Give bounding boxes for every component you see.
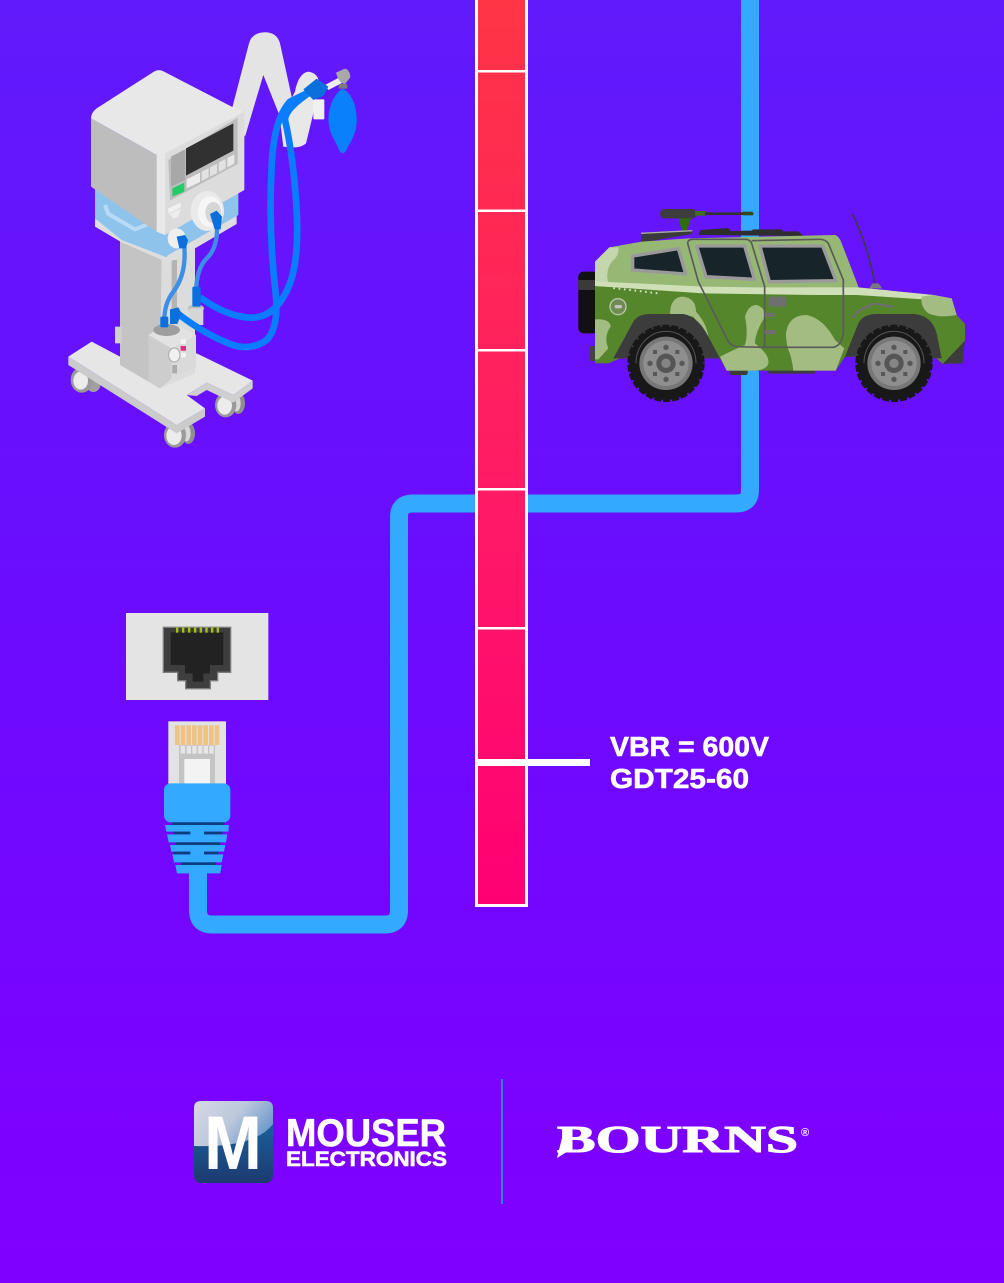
ventilator shelf (95, 213, 237, 263)
fuel cap and rivets (610, 288, 658, 315)
Mouser icon: M (204, 1101, 262, 1186)
main breathing hoses (178, 90, 313, 347)
plug boot (164, 783, 230, 893)
side mirror cable (853, 304, 893, 317)
resuscitator bag (328, 88, 357, 153)
wheels (71, 367, 245, 448)
rear wheel (629, 327, 703, 400)
breathing tube connector (325, 69, 350, 90)
roof rack (641, 228, 803, 243)
voltage label: VBR = 600V (610, 731, 769, 762)
Mouser wordmark (286, 1112, 447, 1171)
voltage label: GDT25-60 (610, 763, 749, 794)
rear bumper (590, 346, 600, 361)
underbody (729, 340, 965, 375)
icon: ethernet socket (126, 613, 268, 700)
door outlines (688, 239, 843, 347)
vehicle lower body (595, 286, 965, 371)
ventilator column (115, 230, 204, 388)
plug contacts (175, 725, 219, 745)
logo: Bourns (557, 1119, 809, 1161)
voltage label (610, 731, 769, 794)
logo: Bourns: BOURNS (557, 1119, 798, 1161)
icon: military vehicle (578, 209, 965, 400)
outlet port (168, 191, 224, 248)
pale body stripe (595, 281, 933, 300)
gauge block (148, 322, 196, 388)
logo divider (501, 1079, 503, 1204)
plug housing (168, 721, 226, 785)
inner hoses (164, 218, 217, 320)
base (68, 342, 253, 433)
antenna (853, 214, 882, 288)
icon: ethernet plug (164, 721, 230, 893)
network cable (198, 0, 750, 924)
mounted gun (660, 209, 753, 231)
logo: Mouser Electronics (194, 1101, 447, 1186)
voltage scale bar (476, 0, 526, 906)
door details (765, 297, 786, 334)
camo patches (595, 295, 957, 371)
ventilator bracket (280, 72, 319, 147)
icon: medical ventilator (68, 32, 357, 448)
logo: Bourns: ® (801, 1127, 809, 1139)
plug latch (179, 745, 215, 785)
wheel arches (613, 314, 942, 358)
ventilator body (91, 70, 244, 235)
camo light patches upper (595, 247, 619, 293)
windows (633, 246, 836, 282)
blue band with handle (95, 187, 238, 257)
vehicle cab (595, 235, 957, 315)
ventilator support arm (232, 32, 292, 137)
spare wheel (578, 272, 598, 333)
hose couplers (160, 79, 328, 327)
Mouser wordmark: ELECTRONICS (286, 1148, 447, 1171)
control panel (168, 118, 238, 219)
Mouser wordmark: MOUSER (286, 1112, 446, 1155)
front wheel (857, 327, 931, 400)
voltage marker line (478, 759, 590, 766)
